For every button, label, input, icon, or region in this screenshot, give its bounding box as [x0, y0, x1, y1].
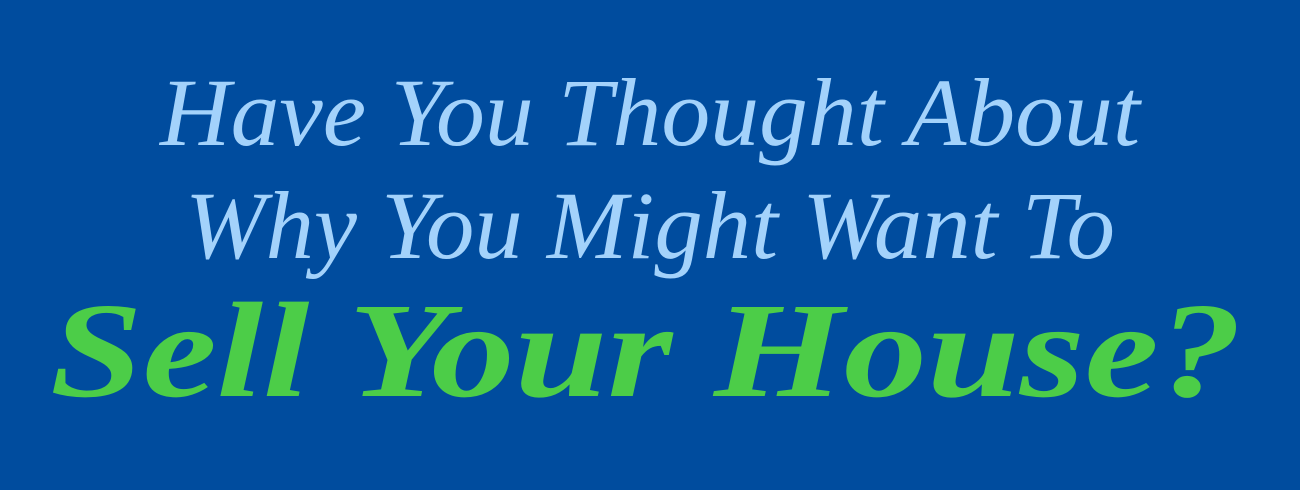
heading line 2: Why You Might Want To [185, 172, 1115, 279]
title: question headline [50, 59, 1242, 426]
heading emphasis: Sell Your House?: Sell Your House? [50, 276, 1242, 426]
heading line 1: Have You Thought About [158, 59, 1142, 166]
